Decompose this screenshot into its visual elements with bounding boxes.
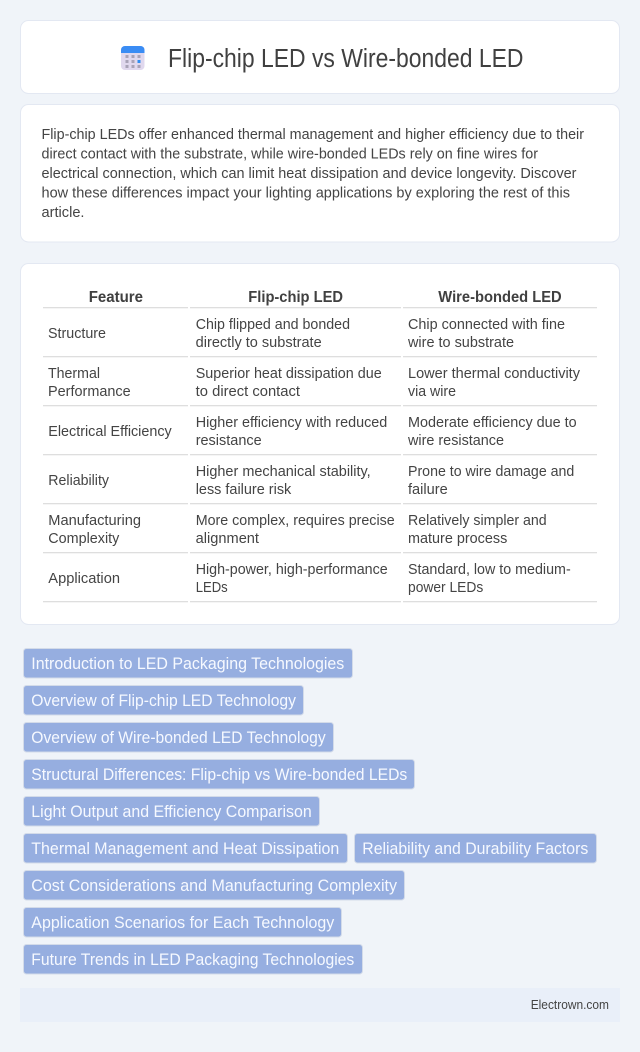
table row: Application: Standard, low to medium- [408, 562, 571, 578]
panel: comparison table [20, 264, 620, 624]
footer [20, 988, 620, 1022]
table row: Structure [48, 317, 565, 351]
chip: Light Output [24, 796, 320, 826]
chip: Overview of Wire-bonded: Overview of Wire-bonded LED Technology [31, 729, 326, 747]
table row: Electrical Efficiency: resistance [196, 433, 262, 449]
table row: Electrical Efficiency: Higher efficiency with reduced [196, 415, 387, 431]
text block: intro paragraph: direct contact with the substrate, while wire-bonded LEDs rely on fine wires for [42, 146, 538, 162]
text block: intro paragraph [42, 127, 584, 221]
table row: Thermal Performance: Superior heat dissipation due [196, 366, 382, 382]
text block: intro paragraph: article. [42, 205, 84, 221]
chip: Light Output: Light Output and Efficiency Comparison [31, 803, 312, 821]
table row: Electrical Efficiency [48, 415, 577, 449]
table row: Thermal Performance: Performance [48, 384, 131, 400]
table row: Reliability [48, 464, 574, 498]
panel: introduction [20, 104, 620, 242]
table row: Reliability: failure [408, 482, 448, 498]
table header row [89, 289, 562, 306]
table row: Structure: directly to substrate [196, 335, 322, 351]
table row: Manufacturing Complexity: mature process [408, 531, 507, 547]
chip: Application Scenarios: Application Scenarios for Each Technology [31, 914, 335, 932]
chip: Cost Considerations: Cost Considerations and Manufacturing Complexity [31, 877, 398, 895]
text block: intro paragraph: how these differences impact your lighting applications by exploring the rest of this [42, 186, 570, 202]
table row: Application: LEDs [196, 580, 228, 596]
chip: Overview of Wire-bonded [24, 722, 334, 752]
table row: Manufacturing Complexity: alignment [196, 531, 259, 547]
table row: Electrical Efficiency: Moderate efficiency due to [408, 415, 577, 431]
icon: calendar grid [121, 46, 144, 70]
chip: Future Trends [24, 944, 362, 974]
chip: Thermal Management: Thermal Management and Heat Dissipation [31, 840, 339, 858]
table row: Thermal Performance [48, 366, 581, 400]
text block: intro paragraph: electrical connection, which can limit heat dissipation and device longevity. Discover [42, 166, 577, 182]
table row: Structure: Chip connected with fine [408, 317, 565, 333]
table row: Application: power LEDs [408, 580, 483, 596]
table row: Thermal Performance: Thermal [48, 366, 100, 382]
chip: Thermal Management [24, 834, 348, 863]
text block: intro paragraph: Flip-chip LEDs offer enhanced thermal management and higher efficiency due to their [42, 127, 584, 143]
chip: Introduction [24, 648, 352, 678]
chip: Reliability and Durability [354, 834, 596, 863]
table row: Thermal Performance: via wire [408, 384, 456, 400]
table row: Electrical Efficiency: Electrical Efficiency [48, 424, 172, 440]
table row: Manufacturing Complexity [48, 513, 547, 547]
chip: Overview of Flip-chip: Overview of Flip-chip LED Technology [31, 692, 297, 710]
chip: Structural Differences: Structural Differences: Flip-chip vs Wire-bonded LEDs [31, 766, 407, 784]
table row: Structure: Structure [48, 326, 106, 342]
chip: Cost Considerations [24, 870, 404, 900]
table row: Manufacturing Complexity: Complexity [48, 531, 120, 547]
table row: Manufacturing Complexity: Relatively simpler and [408, 513, 547, 529]
chip: Introduction: Introduction to LED Packaging Technologies [31, 655, 344, 673]
table row: Application [48, 562, 571, 596]
table row: Structure: Chip flipped and bonded [196, 317, 350, 333]
table row: Structure: wire to substrate [407, 335, 514, 351]
table row: Reliability: less failure risk [196, 482, 292, 498]
table header row: Flip-chip LED [248, 289, 343, 306]
table header row: Wire-bonded LED [438, 289, 562, 306]
title: Flip-chip LED vs Wire-bonded LED [168, 45, 524, 73]
chip: Future Trends: Future Trends in LED Packaging Technologies [31, 951, 354, 969]
table row: Reliability: Prone to wire damage and [408, 464, 574, 480]
chip: Application Scenarios [24, 908, 342, 937]
panel: header [20, 20, 620, 94]
chip: Reliability and Durability: Reliability and Durability Factors [362, 840, 588, 858]
table row: Manufacturing Complexity: Manufacturing [48, 513, 141, 529]
table header row: Feature [89, 289, 143, 306]
table row: Thermal Performance: to direct contact [196, 384, 300, 400]
topic chips list [24, 648, 596, 974]
table row: Electrical Efficiency: wire resistance [407, 433, 504, 449]
chip: Structural Differences [24, 760, 414, 789]
table row: Manufacturing Complexity: More complex, requires precise [196, 513, 395, 529]
chip: Overview of Flip-chip [24, 686, 304, 715]
table row: Thermal Performance: Lower thermal conductivity [408, 366, 581, 382]
table row: Reliability: Higher mechanical stability, [196, 464, 371, 480]
table row: Application: Application [48, 571, 120, 587]
footer credit: Electrown.com [531, 997, 609, 1012]
table row: Application: High-power, high-performance [196, 562, 388, 578]
table row: Reliability: Reliability [48, 473, 110, 489]
